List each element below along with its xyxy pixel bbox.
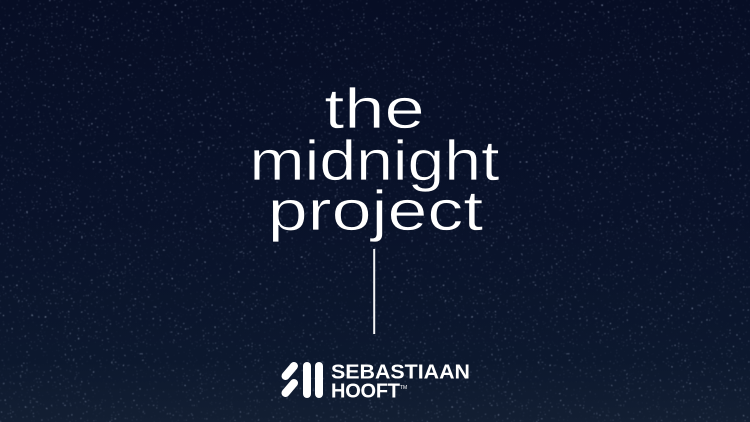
title: the midnight project xyxy=(250,76,499,242)
logo wordmark: TM xyxy=(400,385,407,391)
logo wordmark: SEBASTIAAN xyxy=(331,362,470,384)
title: the midnight project: midnight xyxy=(250,129,499,193)
title: the midnight project: project xyxy=(268,178,483,242)
logo wordmark xyxy=(331,362,470,402)
divider: vertical line xyxy=(373,249,375,334)
logo: Sebastiaan Hooft xyxy=(286,362,470,402)
logo wordmark: HOOFT xyxy=(331,380,400,402)
icon: logo mark of slanted and vertical pills xyxy=(286,366,319,394)
title: the midnight project: the xyxy=(324,76,425,140)
